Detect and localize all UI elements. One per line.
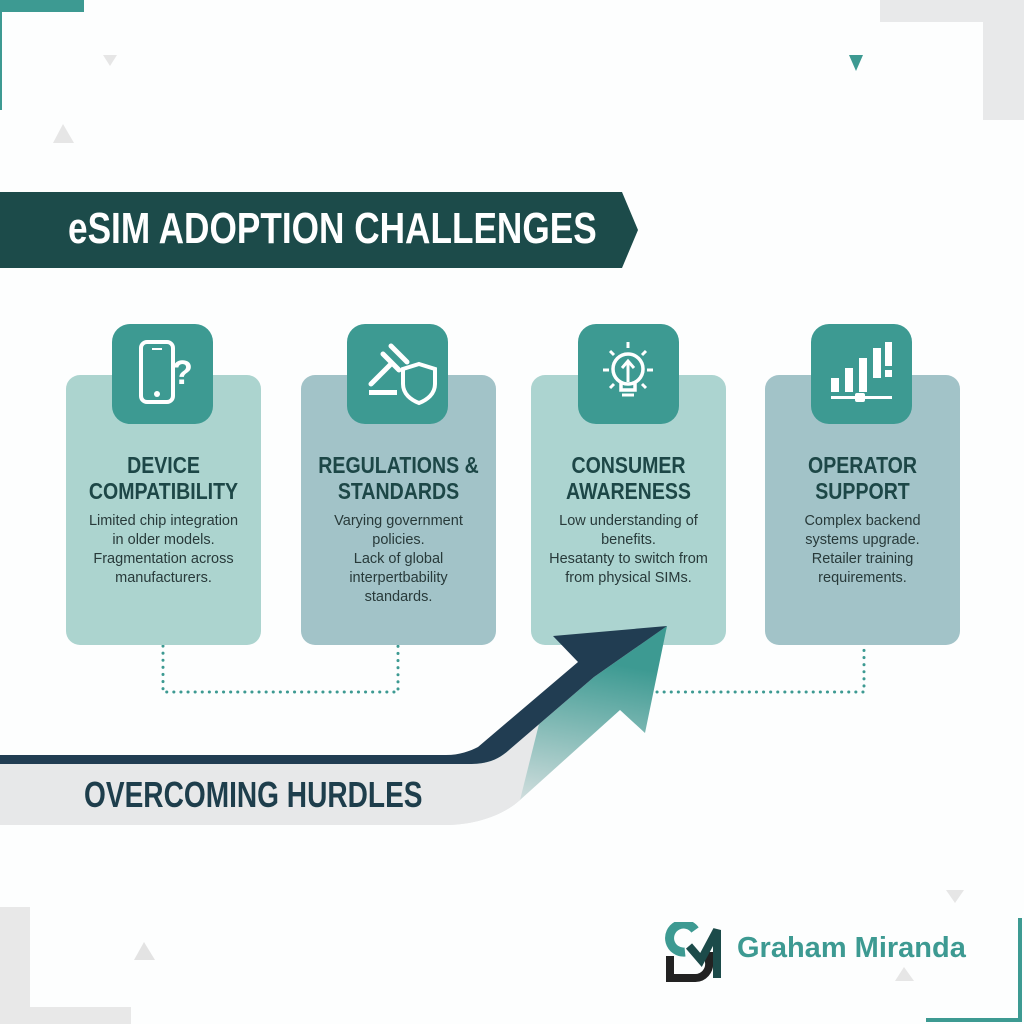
connectors: dotted lines xyxy=(162,645,866,694)
card: device compatibility: COMPATIBILITY xyxy=(89,478,238,504)
title banner xyxy=(0,192,638,268)
card: consumer awareness: Low understanding of xyxy=(559,513,698,529)
icon: phone question xyxy=(112,324,213,424)
card: operator support: OPERATOR xyxy=(808,452,917,478)
card: consumer awareness: Hesatanty to switch from xyxy=(549,551,708,567)
logo: Graham Miranda xyxy=(665,922,966,982)
card: device compatibility: DEVICE xyxy=(127,452,200,478)
card: consumer awareness xyxy=(531,324,726,645)
dark shaft + head xyxy=(0,626,667,764)
card: consumer awareness: benefits. xyxy=(601,532,656,548)
arrow: overcoming hurdles: OVERCOMING HURDLES xyxy=(84,774,423,815)
card: regulations & standards: interpertbability xyxy=(349,570,448,586)
grey band + gradient body xyxy=(0,626,667,825)
icon: lightbulb xyxy=(578,324,679,424)
icon: gavel shield xyxy=(347,324,448,424)
card: regulations & standards: STANDARDS xyxy=(338,478,459,504)
card: operator support: systems upgrade. xyxy=(805,532,920,548)
card: device compatibility: Fragmentation across xyxy=(93,551,234,567)
title banner: eSIM ADOPTION CHALLENGES xyxy=(68,204,597,253)
card: consumer awareness: AWARENESS xyxy=(566,478,691,504)
decor: bottom-left grey corner xyxy=(0,907,30,1024)
icon: phone question: ? xyxy=(172,354,193,392)
card: operator support: Complex backend xyxy=(804,513,921,529)
logo: Graham Miranda: Graham Miranda xyxy=(737,932,966,964)
card: regulations & standards xyxy=(301,324,496,645)
decor: top-left teal corner xyxy=(0,0,84,12)
card: consumer awareness: from physical SIMs. xyxy=(565,570,692,586)
decor: bottom-right teal corner xyxy=(1018,918,1022,1022)
card: regulations & standards: REGULATIONS & xyxy=(318,452,479,478)
icon: bar chart alert xyxy=(811,324,912,424)
card: device compatibility: manufacturers. xyxy=(115,570,212,586)
card: regulations & standards: Lack of global xyxy=(354,551,443,567)
card: operator support xyxy=(765,324,960,645)
card: operator support: SUPPORT xyxy=(815,478,910,504)
card: device compatibility xyxy=(66,324,261,645)
card: device compatibility: Limited chip integration xyxy=(89,513,238,529)
card: operator support: requirements. xyxy=(818,570,907,586)
card: consumer awareness: CONSUMER xyxy=(571,452,686,478)
arrow: overcoming hurdles xyxy=(0,626,667,825)
decor: top-right grey corner xyxy=(880,0,1024,22)
card: regulations & standards: Varying government xyxy=(334,513,463,529)
card: operator support: Retailer training xyxy=(812,551,913,567)
card: regulations & standards: standards. xyxy=(365,589,432,605)
card: regulations & standards: policies. xyxy=(372,532,425,548)
card: device compatibility: in older models. xyxy=(112,532,215,548)
